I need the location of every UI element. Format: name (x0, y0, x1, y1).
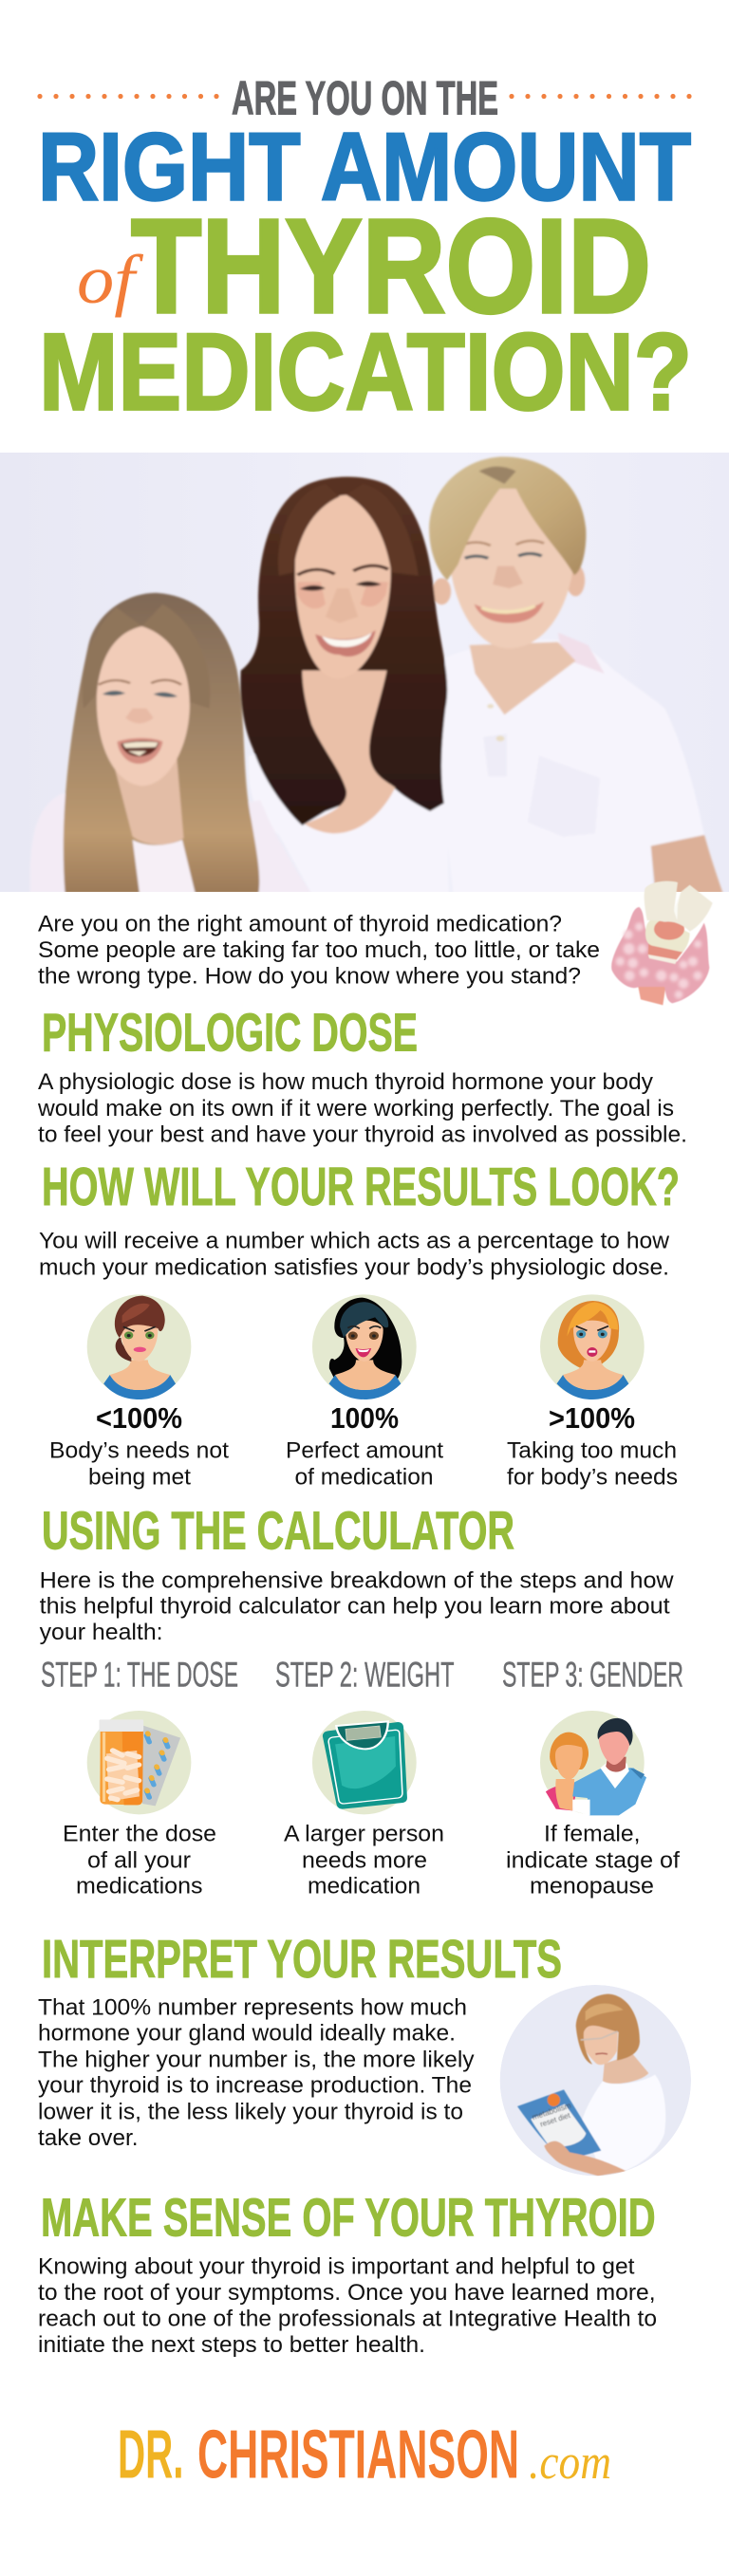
mom neck and chest (302, 671, 395, 833)
caption: step 1: of all your (87, 1847, 191, 1873)
logo: dr: DR. (118, 2418, 184, 2493)
dotted rule left (37, 94, 219, 99)
book (517, 2089, 601, 2161)
icon: woman over 100 percent (540, 1294, 645, 1399)
intro line 2: Some people are taking far too much, too little, or take (38, 937, 600, 963)
interpret line 5: lower it is, the less likely your thyroid is to (38, 2099, 463, 2124)
title line: are you on the: ARE YOU ON THE (232, 72, 498, 125)
calculator text (40, 1567, 674, 1645)
icon: woman at 100 percent (312, 1294, 417, 1399)
calculator line 1: Here is the comprehensive breakdown of the steps and how (40, 1567, 674, 1593)
icon: woman under 100 percent (87, 1294, 191, 1399)
interpret line 1: That 100% number represents how much (38, 1994, 467, 2020)
label: over 100 percent: Taking too much (507, 1438, 677, 1464)
caption: step 2: medication (308, 1874, 421, 1900)
label: under 100 percent: <100% (96, 1401, 182, 1435)
girl hair (64, 593, 259, 894)
logo (118, 2418, 611, 2493)
label: 100 percent: 100% (330, 1401, 399, 1435)
label: under 100 percent (49, 1401, 229, 1490)
caption: step 2: A larger person (284, 1822, 444, 1847)
intro line 3: the wrong type. How do you know where you stand? (38, 964, 581, 990)
step captions (63, 1822, 680, 1900)
make sense line 1: Knowing about your thyroid is important and helpful to get (38, 2254, 635, 2280)
icon: bathroom scale (312, 1711, 417, 1814)
caption: step 3 (506, 1822, 680, 1900)
icon: thyroid gland (611, 881, 713, 1005)
heading: using the calculator: USING THE CALCULATOR (42, 1501, 514, 1562)
logo: dot com: .com (529, 2436, 611, 2490)
logo: christianson: CHRISTIANSON (197, 2418, 519, 2493)
label: under 100 percent: being met (88, 1464, 191, 1490)
family photo (0, 453, 729, 894)
results intro text (39, 1229, 670, 1280)
girl face (97, 626, 190, 786)
label: over 100 percent (507, 1401, 678, 1490)
caption: step 3: If female, (544, 1822, 640, 1847)
make sense line 4: initiate the next steps to better health. (38, 2332, 425, 2358)
results labels (49, 1401, 678, 1490)
title word: of: of (77, 241, 143, 318)
dotted rule right (509, 94, 692, 99)
intro line 1: Are you on the right amount of thyroid medication? (38, 912, 562, 937)
label: under 100 percent: Body’s needs not (49, 1438, 229, 1464)
interpret line 6: take over. (38, 2125, 139, 2151)
physiologic dose text (37, 1069, 687, 1147)
icon: woman and man (540, 1711, 646, 1815)
photo: woman reading book (500, 1985, 691, 2176)
results line 1: You will receive a number which acts as a percentage to how (39, 1229, 670, 1254)
boy shirt (439, 639, 704, 894)
step headings (41, 1656, 683, 1695)
title line: thyroid: THYROID (131, 191, 651, 341)
make sense line 3: reach out to one of the professionals at Integrative Health to (38, 2307, 657, 2332)
physiologic line 3: to feel your best and have your thyroid as involved as possible. (38, 1121, 687, 1147)
results line 2: much your medication satisfies your body’s physiologic dose. (39, 1254, 669, 1280)
photo: woman reading book: reset diet (539, 2111, 572, 2129)
caption: step 3: menopause (530, 1874, 654, 1900)
mom top (249, 740, 449, 894)
caption: step 1: medications (76, 1874, 203, 1900)
title (37, 72, 692, 433)
icon: pill bottle and blister pack (87, 1711, 191, 1814)
mom face (295, 495, 391, 678)
caption: step 2 (284, 1822, 444, 1900)
label: 100 percent: Perfect amount (286, 1438, 443, 1464)
interpret line 3: The higher your number is, the more likely (38, 2047, 475, 2072)
label: 100 percent: of medication (294, 1464, 433, 1490)
label: 100 percent (286, 1401, 443, 1490)
step 1 heading: STEP 1: THE DOSE (41, 1656, 238, 1695)
shirt (582, 2075, 665, 2171)
interpret text (38, 1994, 475, 2151)
calculator line 2: this helpful thyroid calculator can help you learn more about (40, 1594, 670, 1620)
make sense line 2: to the root of your symptoms. Once you have learned more, (38, 2280, 656, 2306)
caption: step 2: needs more (302, 1847, 427, 1873)
make sense text (38, 2254, 657, 2358)
caption: step 3: indicate stage of (506, 1847, 680, 1873)
interpret line 2: hormone your gland would ideally make. (38, 2021, 456, 2047)
caption: step 1: Enter the dose (63, 1822, 216, 1847)
mom hair (240, 476, 447, 825)
photo: woman reading book: metabolism (531, 2101, 572, 2122)
caption: step 1 (63, 1822, 216, 1900)
label: over 100 percent: >100% (549, 1401, 635, 1435)
physiologic line 1: A physiologic dose is how much thyroid hormone your body (38, 1069, 653, 1095)
boy hair (429, 456, 586, 581)
interpret line 4: your thyroid is to increase production. The (38, 2073, 472, 2099)
boy ears and face (433, 578, 451, 604)
label: over 100 percent: for body’s needs (507, 1464, 678, 1490)
calculator line 3: your health: (40, 1620, 163, 1645)
physiologic line 2: would make on its own if it were working perfectly. The goal is (37, 1096, 674, 1121)
intro text (38, 912, 600, 990)
girl shirt (30, 793, 311, 894)
step 2 heading: STEP 2: WEIGHT (275, 1656, 454, 1695)
hand (544, 2141, 626, 2176)
heading: physiologic dose: PHYSIOLOGIC DOSE (42, 1003, 418, 1064)
